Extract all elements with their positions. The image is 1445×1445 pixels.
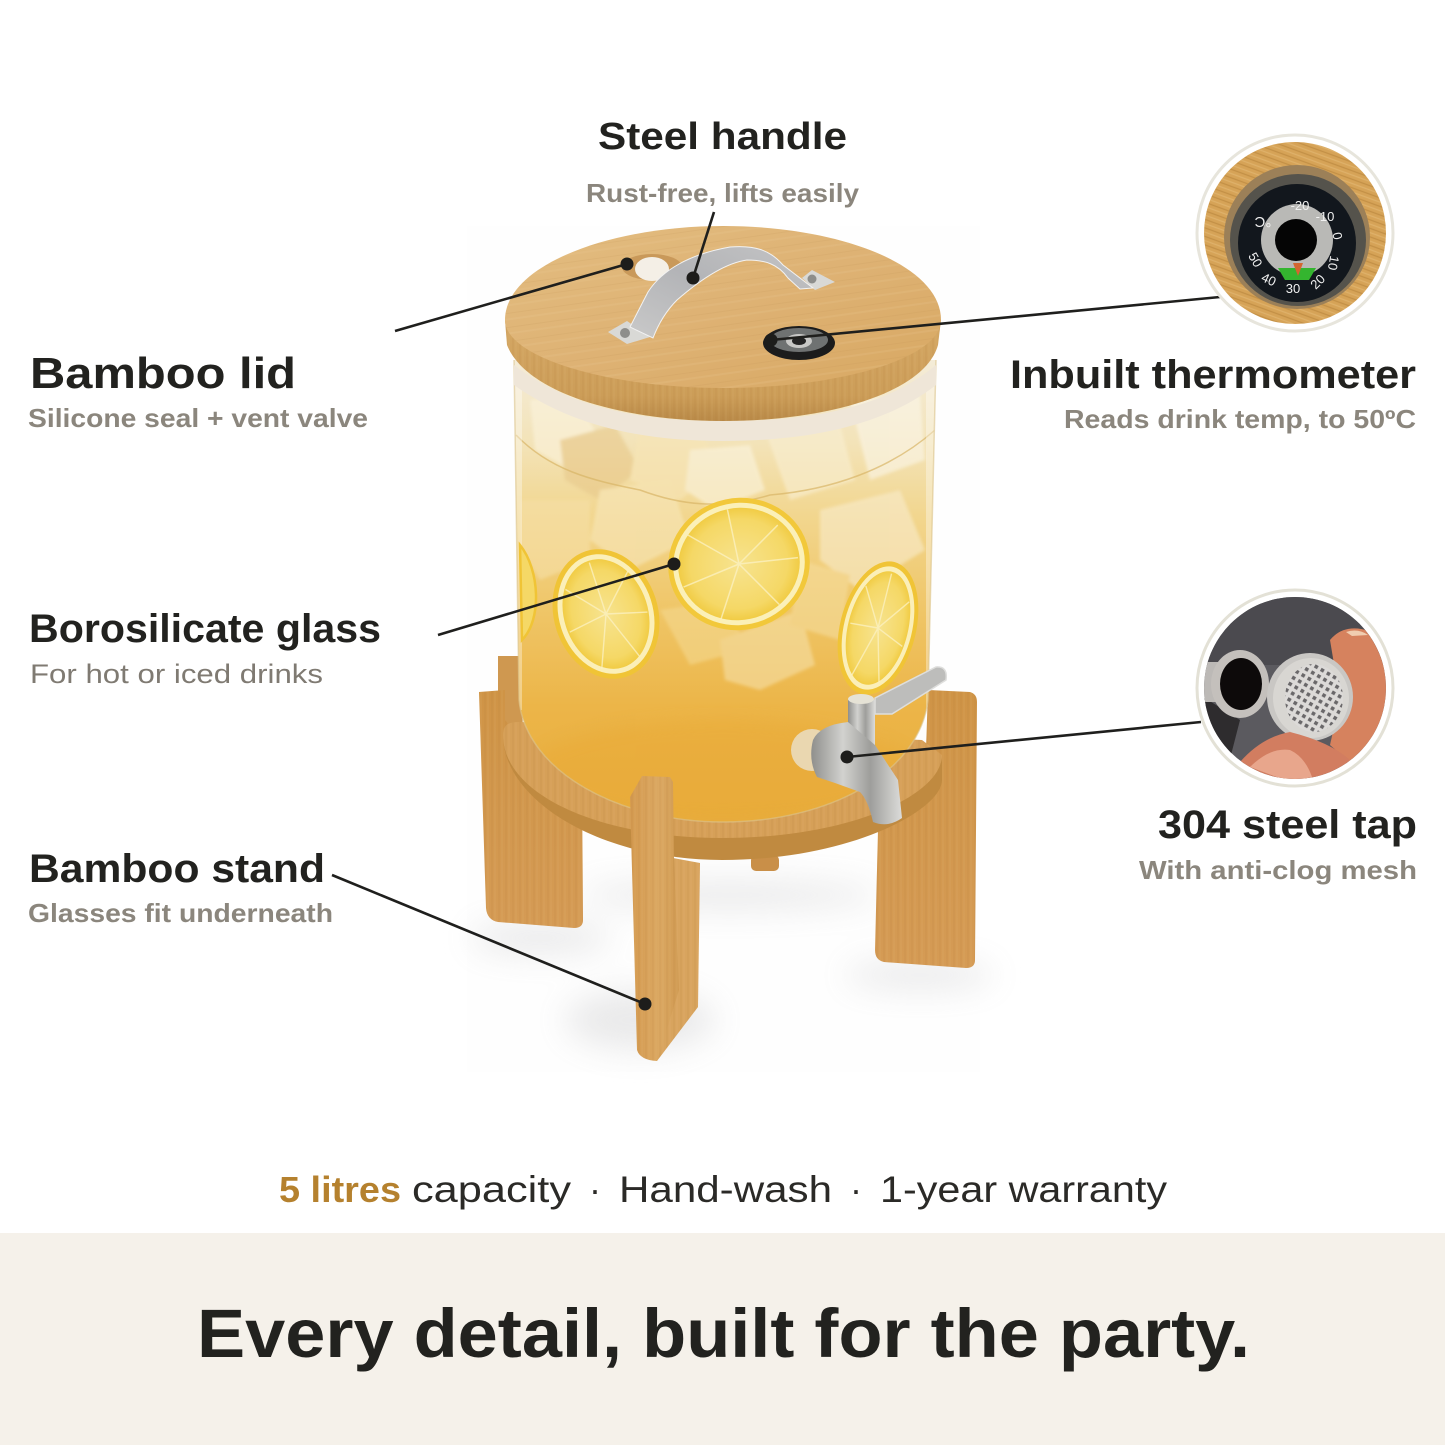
hand-wash: Hand-wash: [619, 1169, 832, 1210]
detail circle: thermometer close-up: [1197, 135, 1393, 331]
heading: 304 steel tap: [1158, 803, 1417, 847]
description: Silicone seal + vent valve: [28, 403, 368, 433]
detail circle: thermometer close-up: -10: [1316, 209, 1334, 224]
back left leg: [479, 656, 583, 928]
leader line: [395, 264, 627, 331]
leader line: [438, 564, 674, 635]
detail circle: thermometer close-up: 40: [1259, 270, 1279, 289]
glass rim band: [514, 365, 936, 441]
detail circle: thermometer close-up: 20: [1307, 271, 1328, 292]
rear foot: [751, 855, 779, 871]
detail circle: thermometer close-up: 50: [1245, 250, 1266, 270]
callout: bamboo stand: [28, 847, 652, 1010]
glass jar with drink: [514, 360, 936, 822]
description: Reads drink temp, to 50ºC: [1064, 404, 1416, 434]
heading: Bamboo lid: [30, 349, 296, 398]
leader line: [771, 297, 1220, 340]
jar outline: [514, 360, 936, 822]
heading: Steel handle: [598, 116, 847, 158]
description: Rust-free, lifts easily: [586, 178, 860, 208]
callout: bamboo lid: [28, 258, 634, 433]
description: For hot or iced drinks: [30, 659, 323, 689]
steel handle: [608, 247, 835, 344]
leader line: [847, 722, 1201, 757]
heading: Bamboo stand: [29, 847, 325, 891]
spec line: [279, 1169, 1168, 1210]
detail circle: anti-clog mesh close-up: [1197, 590, 1393, 790]
footer band: [0, 1233, 1445, 1445]
heading: Borosilicate glass: [29, 607, 381, 651]
lid thermometer: [763, 326, 835, 360]
ice cubes: [520, 395, 925, 690]
callout: borosilicate glass: [29, 558, 680, 689]
liquid shading: [576, 732, 796, 752]
description: With anti-clog mesh: [1139, 855, 1417, 885]
detail circle: thermometer close-up: 10: [1325, 255, 1342, 272]
heading: Inbuilt thermometer: [1010, 353, 1416, 397]
callout: inbuilt thermometer: [764, 297, 1416, 434]
separator: ·: [589, 1169, 601, 1210]
liquid surface line: [516, 430, 935, 504]
capacity highlight: 5 litres: [279, 1169, 401, 1210]
capacity: capacity: [412, 1169, 572, 1210]
dial numbers: -20: [1291, 198, 1309, 213]
floor shadows: [470, 881, 995, 1050]
steel tap: [791, 667, 946, 824]
detail circle: thermometer close-up: 0: [1329, 231, 1346, 241]
detail circle: thermometer close-up: 30: [1286, 281, 1300, 296]
callout: steel handle: [586, 116, 860, 284]
back right leg: [875, 690, 977, 968]
description: Glasses fit underneath: [28, 898, 333, 928]
front leg: [630, 776, 700, 1061]
round stand disc: [503, 722, 942, 860]
glass side highlights: [515, 386, 522, 710]
product photo: bamboo and glass drink dispenser: [467, 226, 995, 1072]
detail circle: thermometer close-up: °C: [1254, 213, 1271, 230]
headline: Every detail, built for the party.: [197, 1295, 1250, 1372]
vent valve: [622, 254, 682, 281]
separator: ·: [850, 1169, 862, 1210]
warranty: 1-year warranty: [880, 1169, 1168, 1210]
callout: 304 steel tap: [840, 722, 1417, 885]
lemon slices: [520, 485, 931, 703]
bamboo lid: [505, 226, 941, 421]
leader line: [332, 875, 645, 1004]
leader line: [693, 212, 714, 278]
